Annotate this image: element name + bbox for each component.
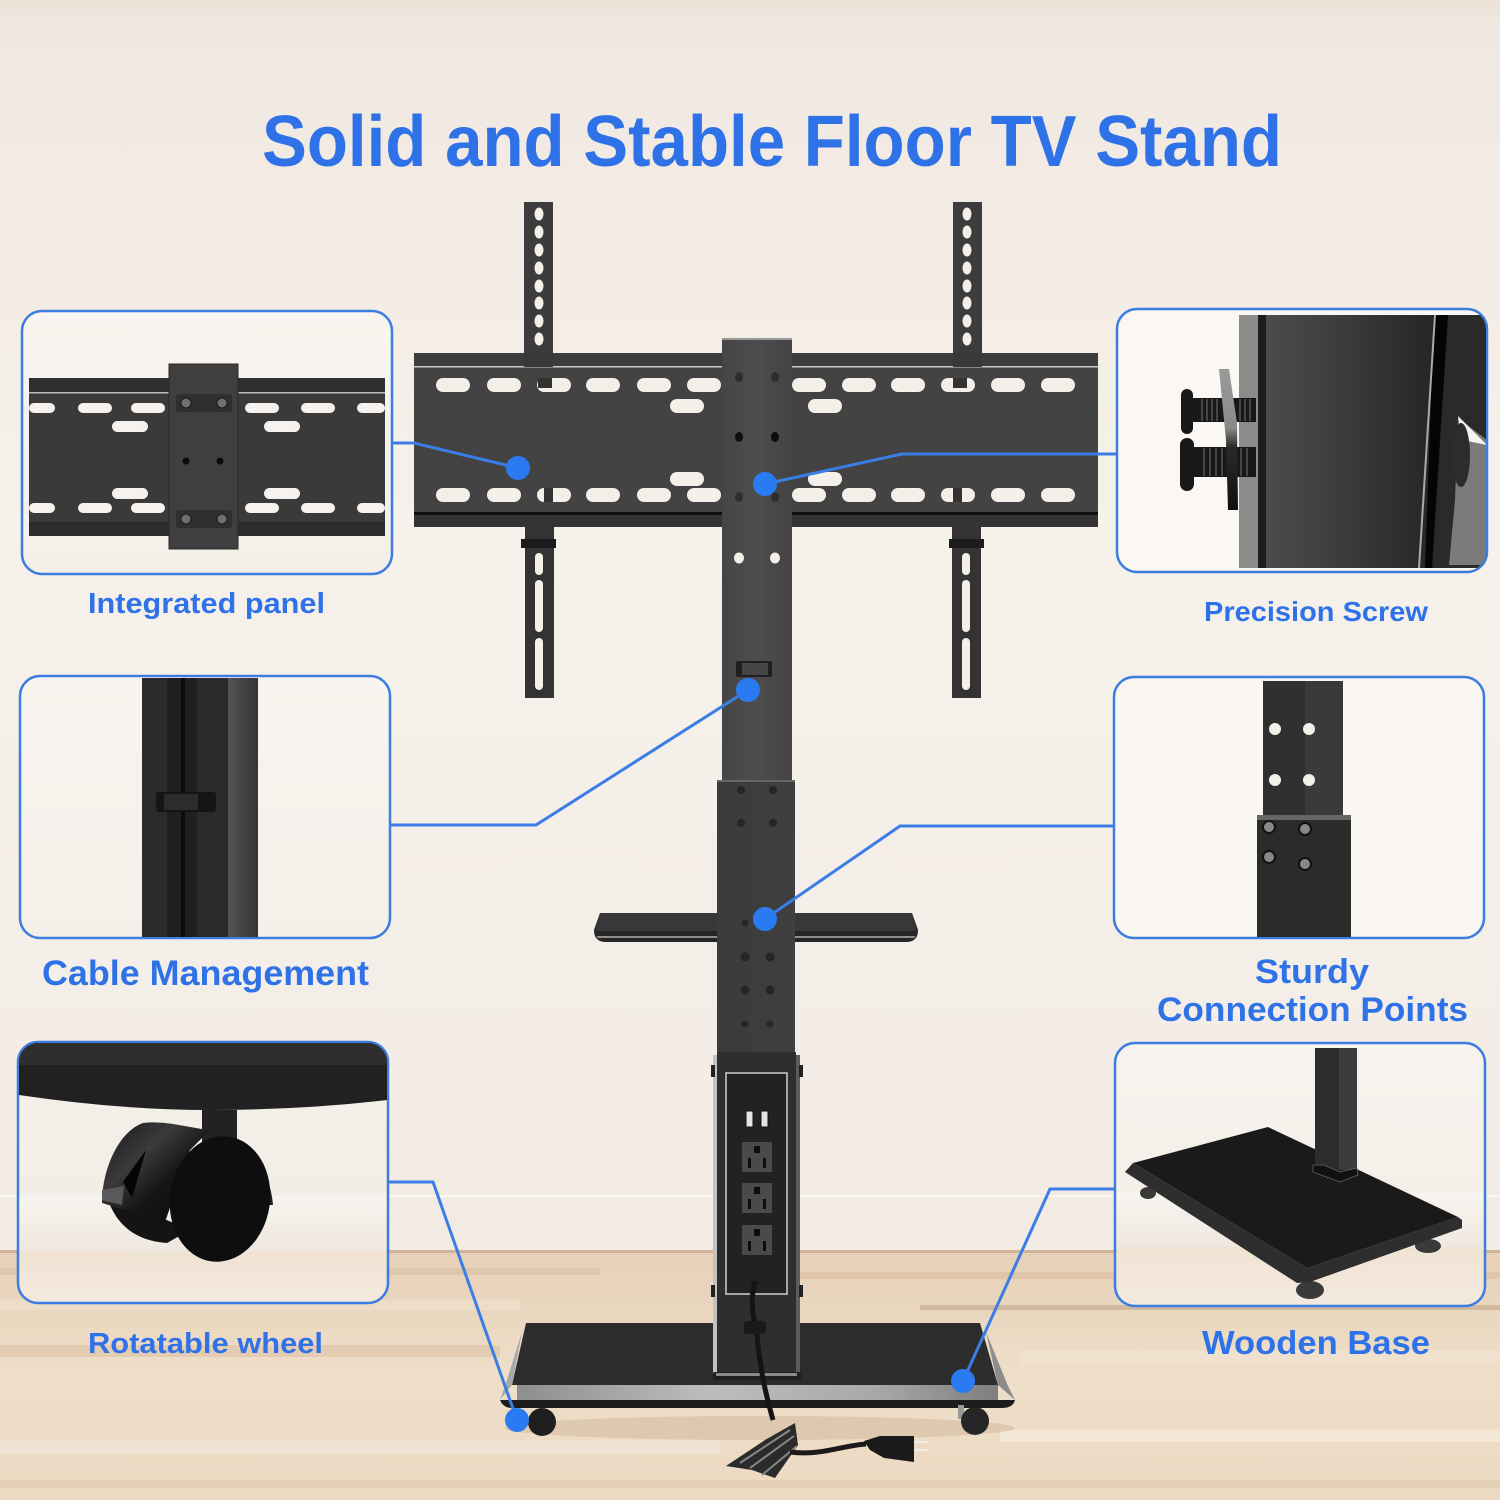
USB ports [746, 1111, 768, 1127]
panel: integrated panel [22, 311, 392, 574]
lower housing with power strip [711, 1052, 803, 1380]
callout: sturdy connection points [753, 826, 1113, 931]
label: sturdy connection points: Sturdy [1255, 953, 1369, 991]
washer [1219, 369, 1238, 510]
upper left VESA arm [524, 202, 553, 357]
panel: wooden base [1115, 1043, 1485, 1306]
power cord and plug [726, 1281, 928, 1478]
panel: rotatable wheel [18, 1042, 388, 1303]
callout: cable management [390, 678, 760, 825]
label: sturdy connection points [1157, 953, 1468, 1029]
callout: wooden base [951, 1189, 1115, 1393]
callout: rotatable wheel [388, 1182, 529, 1432]
callout: precision screw [753, 454, 1117, 496]
middle column [717, 780, 795, 1055]
base board [500, 1323, 1015, 1408]
upper column [722, 338, 792, 783]
panel: cable management [20, 676, 390, 938]
mounting plate [414, 353, 1098, 527]
power outlets [742, 1142, 772, 1255]
label: cable management: Cable Management [42, 954, 369, 993]
label: integrated panel: Integrated panel [88, 588, 325, 620]
lower right VESA arm [949, 525, 984, 698]
left caster [528, 1408, 556, 1436]
title: Solid and Stable Floor TV Stand [262, 102, 1282, 182]
callout: integrated panel [392, 443, 530, 480]
label: precision screw: Precision Screw [1204, 596, 1428, 627]
shelf [594, 913, 918, 942]
upper right VESA arm [953, 202, 982, 357]
label: wooden base: Wooden Base [1202, 1324, 1430, 1361]
label: sturdy connection points: Connection Points [1157, 991, 1468, 1029]
panel: sturdy connection points [1114, 677, 1484, 938]
screws [1180, 389, 1256, 491]
right caster [958, 1405, 989, 1435]
label: rotatable wheel: Rotatable wheel [88, 1328, 323, 1360]
TV stand product [414, 202, 1098, 1478]
callout lines and dots [388, 443, 1117, 1432]
panel: precision screw [1117, 309, 1487, 572]
cable clip [736, 661, 772, 677]
lower left VESA arm [521, 525, 556, 698]
